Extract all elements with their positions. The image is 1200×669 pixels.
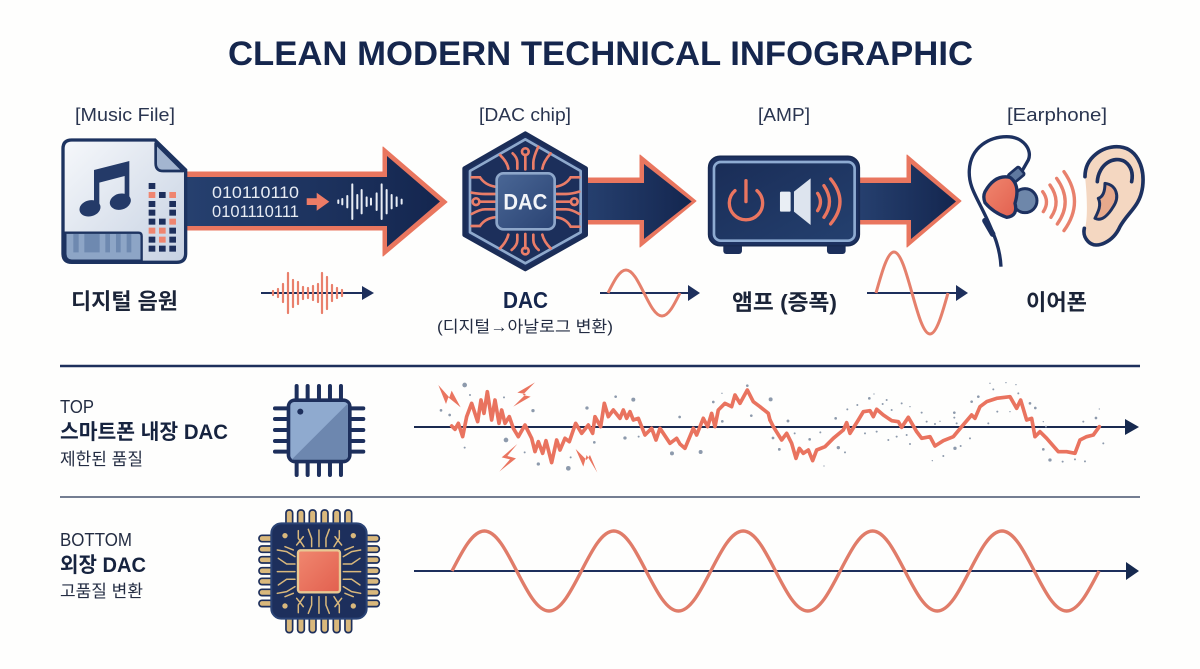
- step label: DAC: DAC: [503, 287, 548, 313]
- icon: earphone and ear: [969, 137, 1143, 267]
- step label: earphone: 이어폰: [1026, 290, 1087, 315]
- step label: amp: 앰프 (증폭): [732, 290, 837, 315]
- sound waves: [1043, 172, 1074, 231]
- earbud: [984, 166, 1037, 217]
- circuit traces: [472, 147, 579, 254]
- binary digits: 010110110: [212, 184, 299, 202]
- label: AMP: [AMP]: [758, 104, 810, 125]
- row: bottom label: [60, 530, 146, 601]
- piano keys strip: [65, 233, 142, 261]
- small waveform: analog: [600, 270, 700, 316]
- title: CLEAN MODERN TECHNICAL INFOGRAPHIC: [228, 35, 973, 73]
- arrow: DAC to amp: [585, 155, 696, 247]
- music note: [78, 161, 133, 219]
- label external DAC: 외장 DAC: [60, 554, 146, 577]
- label: DAC chip: [DAC chip]: [479, 104, 571, 125]
- white waveform: [338, 184, 402, 219]
- label TOP: TOP: [60, 397, 94, 417]
- row: top label: [60, 397, 228, 469]
- speaker symbol: [780, 178, 840, 225]
- step label: digital source: 디지털 음원: [71, 289, 178, 314]
- ear: [1084, 147, 1143, 245]
- small conversion arrow: [307, 193, 329, 211]
- icon: DAC chip hexagon: [464, 133, 586, 269]
- chart: noisy signal from built-in DAC: [414, 382, 1139, 473]
- chart: clean sine from external DAC: [414, 531, 1139, 611]
- noise particles right: [772, 382, 1104, 467]
- label: music file: [Music File]: [75, 104, 175, 125]
- icon: basic chip: [275, 386, 363, 475]
- small waveform: digital: [261, 273, 374, 313]
- icon: high-end chip: [259, 510, 379, 633]
- icon: amplifier: [709, 156, 859, 254]
- label built-in DAC: 스마트폰 내장 DAC: [60, 421, 228, 444]
- label BOTTOM: BOTTOM: [60, 530, 132, 550]
- label: earphone: [Earphone]: [1007, 104, 1107, 125]
- noise particles left: [440, 383, 789, 471]
- earphone cable: [969, 137, 1029, 267]
- label high quality: 고품질 변환: [60, 582, 143, 601]
- binary digits second row: 0101110111: [212, 203, 299, 221]
- step sublabel: conversion: (디지털→아날로그 변환): [437, 318, 613, 336]
- data pixel grid: [149, 183, 176, 252]
- arrow: amp to earphone: [858, 155, 961, 247]
- icon: music file: [63, 140, 186, 262]
- power symbol: [729, 181, 763, 220]
- lightning bolts: [438, 382, 597, 473]
- amplified waveform: [867, 252, 968, 334]
- label limited quality: 제한된 품질: [60, 450, 143, 469]
- chip text: DAC: [503, 189, 547, 214]
- arrow: file to DAC: [187, 147, 447, 256]
